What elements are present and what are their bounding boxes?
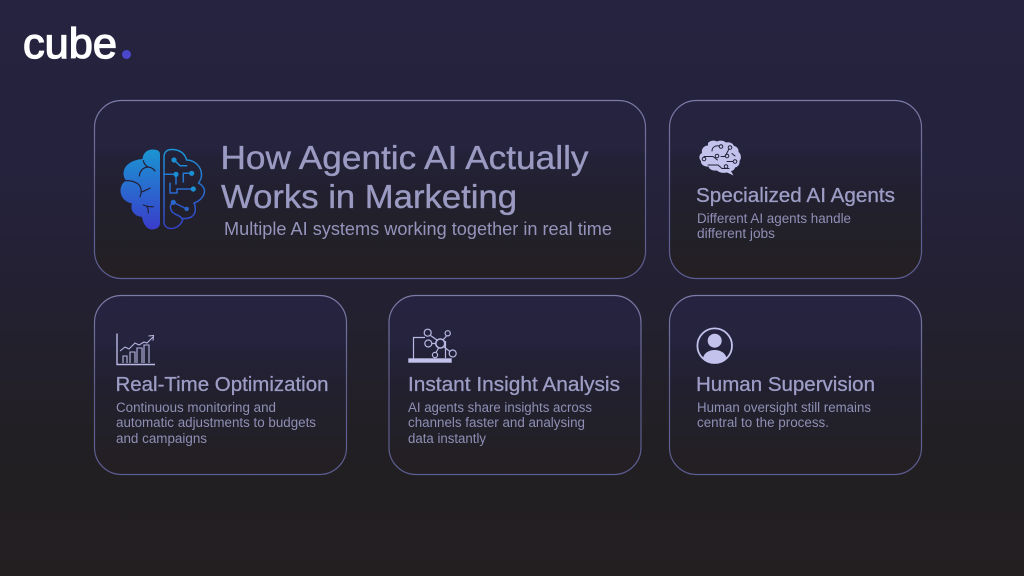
icon: growth chart bbox=[117, 334, 155, 364]
heading: Specialized AI Agents bbox=[696, 184, 895, 207]
logo: cube: cube bbox=[23, 20, 117, 68]
heading: title bbox=[220, 139, 589, 215]
text block bbox=[408, 400, 592, 446]
panel: Instant Insight Analysis bbox=[389, 296, 641, 474]
text block: Different AI agents handle bbox=[697, 211, 851, 226]
icon: person in circle bbox=[697, 328, 732, 363]
icon: laptop network bbox=[408, 329, 456, 363]
icon: brain with circuits bbox=[120, 150, 204, 230]
text block bbox=[697, 400, 871, 430]
icon: circuit brain bbox=[699, 141, 741, 176]
text block: channels faster and analysing bbox=[408, 415, 585, 430]
text block: different jobs bbox=[697, 226, 775, 241]
text block: Human oversight still remains bbox=[697, 400, 871, 415]
text block: and campaigns bbox=[116, 431, 207, 446]
panel: Specialized AI Agents bbox=[670, 100, 922, 278]
heading: Human Supervision bbox=[696, 373, 875, 396]
panel: title card bbox=[94, 100, 646, 278]
text block bbox=[116, 400, 316, 446]
panel: Human Supervision bbox=[670, 296, 922, 474]
text block: Continuous monitoring and bbox=[116, 400, 276, 415]
text block: central to the process. bbox=[697, 415, 829, 430]
text block: data instantly bbox=[408, 431, 486, 446]
text block: automatic adjustments to budgets bbox=[116, 415, 316, 430]
heading: Real-Time Optimization bbox=[116, 373, 328, 396]
text: subtitle: Multiple AI systems working together in real time bbox=[224, 219, 612, 239]
heading: title: How Agentic AI Actually bbox=[220, 139, 589, 176]
text block: AI agents share insights across bbox=[408, 400, 592, 415]
heading: Instant Insight Analysis bbox=[408, 373, 620, 396]
text block bbox=[697, 211, 851, 241]
heading: title: Works in Marketing bbox=[221, 178, 517, 215]
panel: Real-Time Optimization bbox=[94, 296, 346, 474]
